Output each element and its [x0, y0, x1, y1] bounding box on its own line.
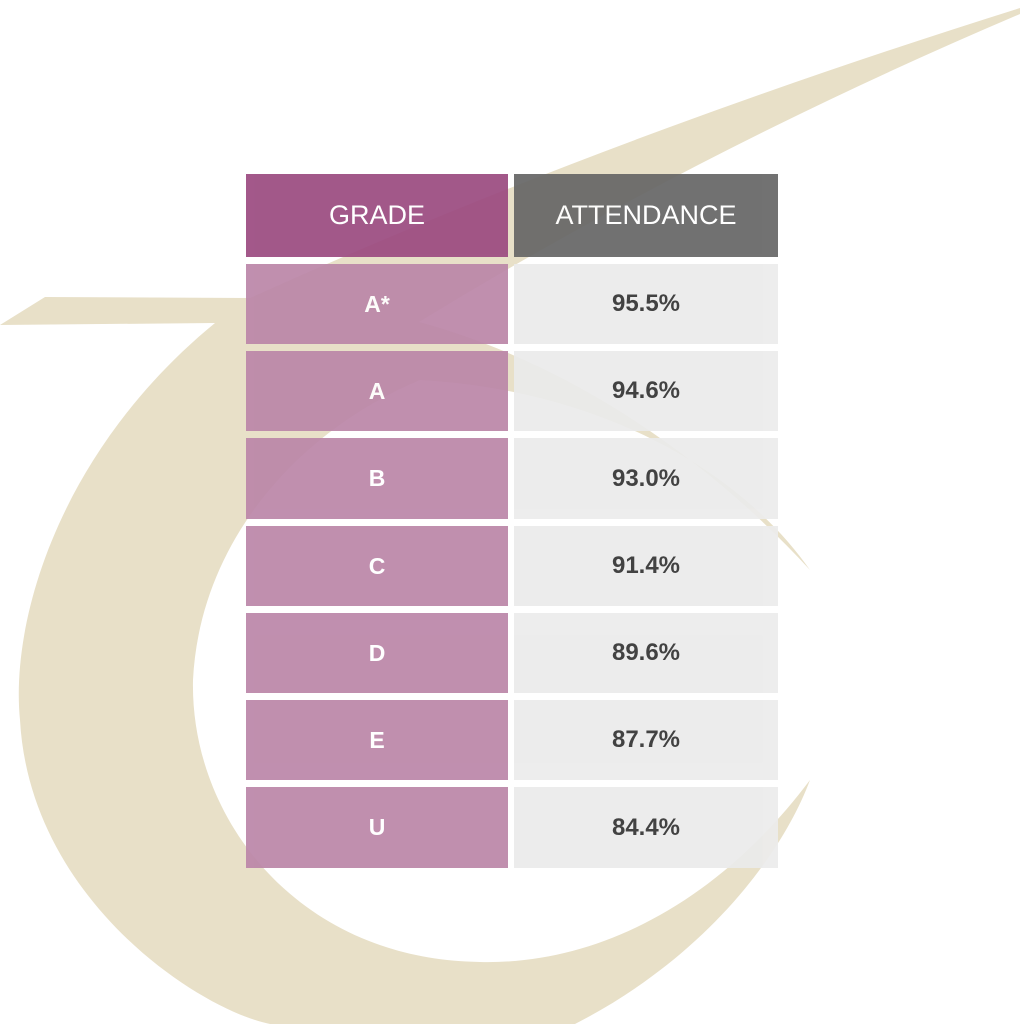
value A*	[514, 264, 778, 344]
value C	[514, 526, 778, 606]
row B: B	[369, 465, 385, 491]
value A: 94.6%	[612, 377, 680, 404]
header: grade	[246, 174, 508, 257]
row B	[246, 438, 508, 519]
row C: C	[369, 552, 385, 578]
value D	[514, 613, 778, 693]
row A: A	[369, 378, 385, 404]
header: attendance: ATTENDANCE	[555, 200, 736, 230]
value B	[514, 438, 778, 519]
row E	[246, 700, 508, 780]
table	[246, 174, 778, 868]
row A	[246, 351, 508, 431]
row C	[246, 526, 508, 606]
row D	[246, 613, 508, 693]
value D: 89.6%	[612, 639, 680, 666]
row U	[246, 787, 508, 868]
value E	[514, 700, 778, 780]
header: attendance	[514, 174, 778, 257]
value A	[514, 351, 778, 431]
row U: U	[369, 814, 385, 840]
header: grade: GRADE	[329, 200, 425, 230]
value C: 91.4%	[612, 552, 680, 579]
value U	[514, 787, 778, 868]
value B: 93.0%	[612, 464, 680, 492]
row A*: A*	[364, 290, 390, 316]
value E: 87.7%	[612, 726, 680, 753]
row A*	[246, 264, 508, 344]
row D: D	[369, 640, 385, 666]
row E: E	[369, 726, 385, 752]
value U: 84.4%	[612, 814, 680, 840]
value A*: 95.5%	[612, 290, 680, 317]
